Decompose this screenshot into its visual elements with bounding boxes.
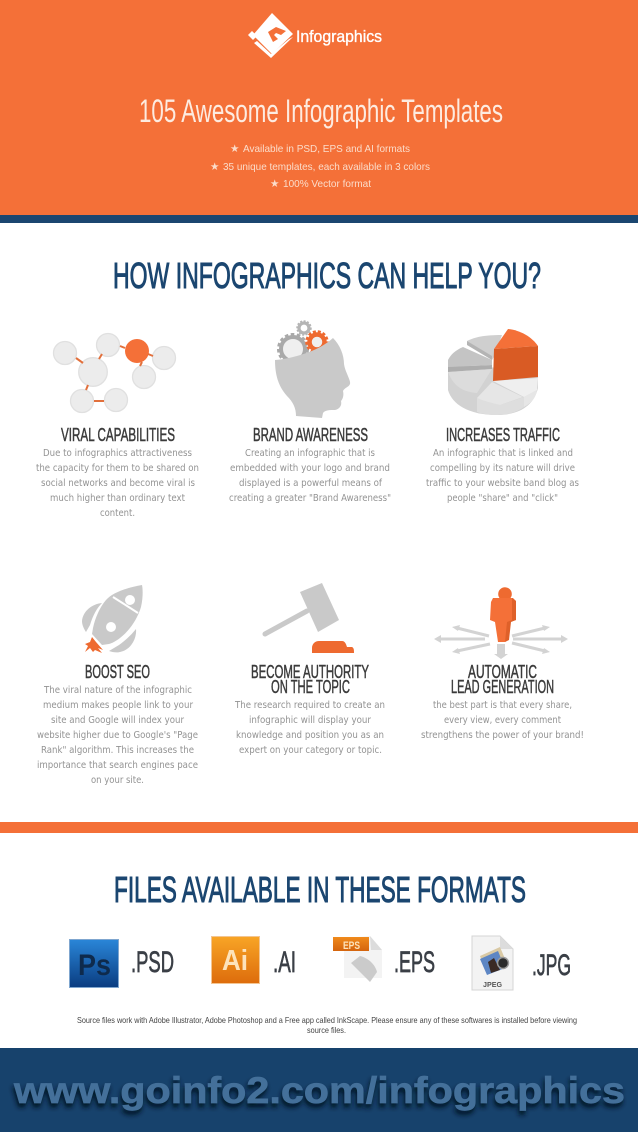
- body text: expert on your category or topic.: [239, 745, 382, 756]
- body text: The research required to create an: [234, 700, 385, 711]
- label: .EPS: [394, 946, 435, 979]
- title: INCREASES TRAFFIC: [446, 425, 560, 445]
- label: .JPG: [532, 949, 571, 982]
- title: BECOME AUTHORITY: [251, 662, 369, 682]
- body text: traffic to your website band blog as: [426, 478, 579, 489]
- icon: gavel: [265, 583, 354, 653]
- body text: [229, 448, 391, 504]
- title: BOOST SEO: [85, 662, 150, 682]
- title: LEAD GENERATION: [451, 677, 554, 697]
- title: [251, 662, 369, 697]
- body text: [36, 448, 199, 519]
- logo wordmark: Infographics: [296, 27, 382, 46]
- icon: head with gears: [275, 321, 350, 418]
- body text: [421, 700, 584, 741]
- body text: importance that search engines pace: [37, 760, 198, 771]
- body text: compelling by its nature will drive: [430, 463, 575, 474]
- icon: ps: Ps: [78, 949, 111, 982]
- body text: content.: [100, 508, 135, 519]
- body text: displayed is a powerful means of: [239, 478, 382, 489]
- feature list: 100% Vector format: [283, 179, 371, 190]
- body text: knowledge and position you as an: [236, 730, 384, 741]
- icon: network: [54, 334, 176, 412]
- feature list: ★: [230, 144, 239, 155]
- body text: people "share" and "click": [447, 493, 558, 504]
- icon: eps: EPS: [343, 940, 360, 952]
- feature list: 35 unique templates, each available in 3 colors: [223, 162, 430, 173]
- format: psd: [70, 940, 174, 988]
- body text: infographic will display your: [249, 715, 372, 726]
- body text: the capacity for them to be shared on: [36, 463, 199, 474]
- footnote: [77, 1015, 577, 1035]
- icon: ai: Ai: [222, 945, 248, 977]
- body text: embedded with your logo and brand: [230, 463, 390, 474]
- title: BRAND AWARENESS: [253, 425, 368, 445]
- format: jpg: [472, 936, 571, 990]
- panel: boost seo: [37, 585, 198, 786]
- label: .PSD: [131, 946, 174, 979]
- body text: site and Google will index your: [51, 715, 185, 726]
- body text: An infographic that is linked and: [433, 448, 573, 459]
- panel: increases traffic: [426, 329, 579, 504]
- title: [451, 662, 554, 697]
- body text: [234, 700, 385, 756]
- footer band: [0, 1048, 638, 1132]
- body text: [426, 448, 579, 504]
- body text: Creating an infographic that is: [245, 448, 375, 459]
- body text: Rank" algorithm. This increases the: [41, 745, 194, 756]
- body text: on your site.: [91, 775, 144, 786]
- body text: [37, 685, 198, 786]
- body text: social networks and become viral is: [41, 478, 195, 489]
- body text: medium makes people link to your: [43, 700, 194, 711]
- body text: strengthens the power of your brand!: [421, 730, 584, 741]
- label: .AI: [273, 946, 296, 979]
- title: AUTOMATIC: [468, 662, 537, 682]
- panel: brand awareness: [229, 321, 391, 504]
- body text: creating a greater "Brand Awareness": [229, 493, 391, 504]
- body text: Due to infographics attractiveness: [43, 448, 192, 459]
- title: ON THE TOPIC: [271, 677, 350, 697]
- icon: person with arrows: [434, 587, 568, 659]
- icon: rocket: [82, 585, 143, 653]
- body text: every view, every comment: [444, 715, 561, 726]
- format: ai: [212, 936, 296, 984]
- panel: viral capabilities: [36, 334, 199, 519]
- feature list: Available in PSD, EPS and AI formats: [243, 144, 410, 155]
- icon: pie chart: [448, 329, 538, 415]
- footnote: source files.: [307, 1025, 346, 1035]
- panel: become authority: [234, 583, 385, 756]
- body text: The viral nature of the infographic: [43, 685, 192, 696]
- body text: the best part is that every share,: [433, 700, 572, 711]
- logo mark: [248, 13, 293, 58]
- feature list: [210, 144, 430, 190]
- header panel: [0, 0, 638, 223]
- body text: much higher than ordinary text: [50, 493, 185, 504]
- footnote: Source files work with Adobe Illustrator, Adobe Photoshop and a Free app called InkScape. Please ensure any of these softwares is installed before viewing: [77, 1015, 577, 1025]
- feature list: ★: [270, 179, 279, 190]
- title: VIRAL CAPABILITIES: [61, 425, 175, 445]
- footer band: www.goinfo2.com/infographics: [12, 1073, 624, 1115]
- icon: jpeg: JPEG: [483, 980, 502, 989]
- body text: website higher due to Google's "Page: [37, 730, 198, 741]
- website url: www.goinfo2.com/infographics: [13, 1069, 625, 1111]
- format: eps: [333, 936, 435, 982]
- panel: automatic lead generation: [421, 587, 584, 741]
- feature list: ★: [210, 162, 219, 173]
